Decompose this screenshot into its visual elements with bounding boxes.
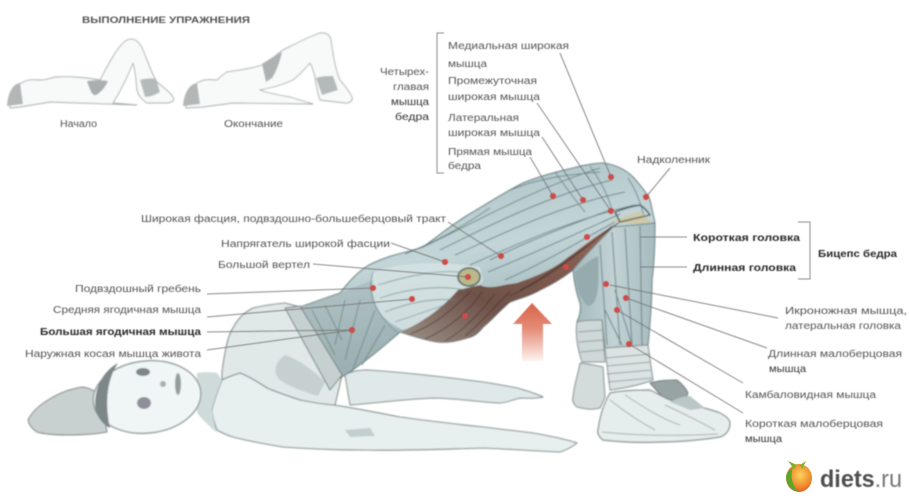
lower leg labels: Длинная малоберцовая — [768, 348, 902, 360]
waist band — [285, 306, 342, 390]
left side labels: Наружная косая мышца живота — [25, 349, 202, 360]
torso — [222, 303, 342, 405]
calf — [573, 223, 655, 348]
quadriceps muscle labels: бедра — [448, 160, 482, 172]
quadriceps muscle labels: широкая мышца — [448, 128, 541, 139]
quadriceps muscle labels: Латеральная — [448, 113, 519, 124]
quadriceps group label: мышца — [391, 97, 429, 108]
muscle fibres: obliques — [312, 300, 385, 372]
quadriceps muscle labels: Прямая мышца — [448, 147, 533, 158]
left side labels: Большой вертел — [218, 260, 310, 271]
quadriceps group label: бедра — [395, 111, 430, 123]
far arm — [345, 370, 543, 405]
front sock — [605, 345, 653, 390]
left side labels: Подвздошный гребень — [75, 283, 201, 295]
thigh and hip muscle mass — [300, 163, 655, 378]
main figure: gluteal bridge anatomy — [28, 163, 730, 452]
quadriceps muscle labels: Промежуточная — [448, 76, 537, 87]
figure: end position — [186, 33, 352, 108]
near arm shading — [345, 428, 375, 437]
icon: apple — [786, 461, 812, 492]
quadriceps group label — [380, 67, 430, 123]
calf muscle shadow — [575, 256, 599, 306]
lower leg labels: мышца — [769, 364, 806, 375]
figure: start position — [10, 39, 174, 108]
calf fibres — [600, 226, 642, 345]
muscle fibres: hamstring — [410, 222, 620, 341]
back shoe — [573, 363, 605, 409]
face features — [136, 368, 181, 409]
quadriceps group label: Четырех- — [380, 67, 429, 78]
left side labels: Большая ягодичная мышца — [40, 327, 201, 338]
arrow: upward lift — [513, 303, 552, 361]
small figures: exercise demonstration — [7, 33, 352, 108]
quadriceps group label: главая — [393, 82, 429, 93]
lower leg labels: мышца — [745, 434, 782, 445]
left side labels: Средняя ягодичная мышца — [53, 305, 202, 316]
gluteus medius highlight — [372, 263, 483, 330]
biceps femoris labels: Короткая головка — [693, 233, 801, 244]
quadriceps muscle labels — [448, 41, 569, 172]
logo: diets.ru — [786, 461, 902, 493]
leader lines — [207, 33, 810, 413]
lower leg labels: Короткая малоберцовая — [745, 418, 883, 430]
far shoe toe — [650, 380, 688, 402]
quadriceps muscle labels: широкая мышца — [448, 92, 541, 103]
hamstring: red-brown — [400, 216, 630, 342]
logo: diets.ru: diets.ru — [820, 466, 902, 493]
lower leg labels: латеральная головка — [785, 321, 902, 332]
front shoe — [598, 390, 730, 442]
biceps femoris labels: Длинная головка — [693, 263, 797, 274]
muscle fibres: gluteus — [371, 272, 465, 333]
label: kneecap: Надколенник — [637, 155, 711, 166]
left side labels — [25, 213, 446, 360]
left side labels: Напрягатель широкой фасции — [221, 238, 390, 250]
left side labels: Широкая фасция, подвздошно-большеберцовый тракт — [141, 213, 446, 225]
quadriceps muscle labels: Медиальная широкая — [448, 41, 569, 52]
quadriceps muscle labels: мышца — [448, 59, 488, 70]
near arm — [212, 373, 577, 452]
neck — [197, 372, 222, 433]
lower leg labels — [745, 306, 907, 445]
muscle fibres: quadriceps — [405, 166, 645, 280]
hairline — [95, 363, 118, 428]
caption: start: Начало — [60, 119, 97, 130]
lower leg labels: Камбаловидная мышца — [745, 389, 877, 401]
obliques shading — [300, 280, 397, 378]
heading: exercise performance: ВЫПОЛНЕНИЕ УПРАЖНЕНИЯ — [82, 15, 250, 26]
hair — [28, 387, 107, 435]
back sock — [576, 320, 605, 362]
greater trochanter — [458, 268, 480, 286]
anatomy marker dots — [349, 174, 649, 347]
knee tendons — [612, 212, 652, 224]
biceps femoris labels — [693, 233, 897, 274]
head — [90, 356, 204, 438]
biceps femoris labels: Бицепс бедра — [818, 248, 897, 260]
lower leg labels: Икроножная мышца, — [785, 306, 907, 317]
caption: finish: Окончание — [224, 119, 284, 130]
torso shading — [275, 355, 325, 396]
